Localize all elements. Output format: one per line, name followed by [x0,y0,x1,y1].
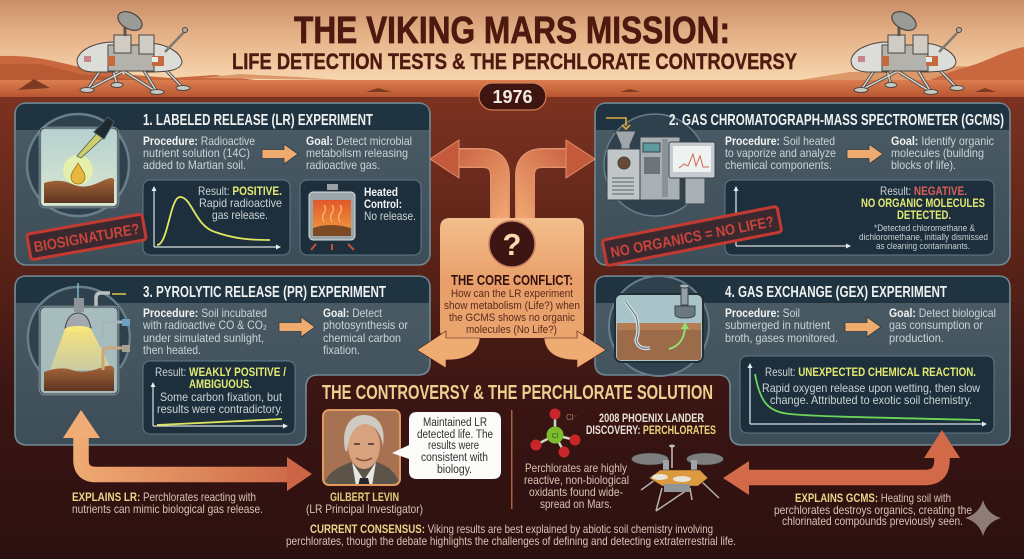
icon: sparkle [965,500,1001,536]
panel: GCMS experiment [595,103,1010,266]
heated control box: Control: [364,197,402,211]
chart: unexpected reaction result [740,356,994,433]
subtitle: LIFE DETECTION TESTS & THE PERCHLORATE CONTROVERSY [232,49,797,74]
heading: Phoenix discovery: DISCOVERY: PERCHLORATES [586,425,716,437]
year badge [479,83,546,110]
heated control box: Heated [364,185,398,199]
year badge: 1976 [492,87,533,107]
arrow [262,144,298,164]
icon: question mark [489,221,535,267]
panel: gas exchange experiment [595,276,1010,445]
chart: weakly positive result: results were contradictory. [157,402,283,416]
panel: pyrolytic release experiment [15,276,430,445]
procedure text [143,134,255,172]
arrow: conflict to experiment 2 [525,140,595,222]
text: current consensus: perchlorates, though the debate highlights the challenges of defining and detecting extraterrestrial life. [286,535,736,548]
goal text: Goal: Detect biological [889,306,996,320]
heading: controversy section: THE CONTROVERSY & THE PERCHLORATE SOLUTION [322,382,713,404]
chart: negative result: *Detected chloromethane & [874,223,975,233]
goal text: Goal: Identify organic [891,134,994,148]
chart: unexpected reaction result: change. Attributed to exotic soil chemistry. [770,393,972,407]
procedure text [725,306,838,345]
chart: positive result: gas release. [212,208,268,222]
text: perchlorates description: Perchlorates are highly [525,462,627,475]
chart: positive result [143,180,290,255]
icon: broth chamber [609,276,709,376]
conflict text: molecules (No Life?) [466,324,557,336]
text: explains GCMS: chlorinated compounds previously seen. [782,515,963,528]
goal text [306,134,412,172]
heading: 3. PYROLYTIC RELEASE (PR) EXPERIMENT [143,284,386,301]
arrow: explains LR [63,410,312,491]
icon: perchlorate molecule [530,408,580,458]
conflict text: How can the LR experiment [451,288,574,300]
heated control box: No release. [364,209,416,223]
procedure text: nutrient solution (14C) [143,146,250,160]
goal text: Goal: Detect microbial [306,134,412,148]
chart: weakly positive result: Result: WEAKLY POSITIVE / [155,365,287,379]
goal text: fixation. [323,343,360,357]
procedure text: with radioactive CO & CO₂ [142,318,267,332]
chart: negative result [725,180,994,255]
icon: soil beaker with dropper [27,114,129,216]
speech bubble: detected life. The [417,429,493,441]
procedure text: Procedure: Radioactive [143,134,255,148]
procedure text: added to Martian soil. [143,158,246,172]
conflict text [444,288,580,336]
text: explains GCMS: perchlorates destroys organics, creating the [774,504,972,517]
caption: Gilbert Levin: (LR Principal Investigator) [306,503,423,516]
text: perchlorates description: oxidants found wide- [529,486,623,499]
procedure text: under simulated sunlight, [143,331,264,345]
icon: GCMS machine [604,114,715,216]
procedure text: to vaporize and analyze [725,146,836,160]
heading: Phoenix discovery: 2008 PHOENIX LANDER [599,413,705,425]
goal text: radioactive gas. [306,158,380,172]
chart: positive result: Result: POSITIVE. [198,184,282,198]
procedure text: Procedure: Soil heated [725,134,835,148]
chart: negative result: Result: NEGATIVE. [880,184,967,198]
speech bubble: consistent with [421,452,488,464]
text: explains LR [72,491,263,516]
goal text: photosynthesis or [323,318,408,332]
icon: perchlorate molecule: Cl⁻ [566,413,578,422]
chart: weakly positive result [143,361,295,434]
text: explains LR: EXPLAINS LR: Perchlorates reacting with [72,491,256,504]
icon: Viking lander left [77,8,190,94]
arrow: explains GCMS [723,430,960,495]
panel: labeled release experiment [15,103,430,265]
icon: lamp chamber [28,283,130,394]
panel: core conflict [440,218,584,338]
heading: 1. LABELED RELEASE (LR) EXPERIMENT [143,112,373,129]
goal text: molecules (building [891,146,984,160]
procedure text: then heated. [143,343,201,357]
conflict heading: THE CORE CONFLICT: [451,272,573,289]
procedure text: broth, gases monitored. [725,331,838,345]
goal text [323,306,408,357]
speech bubble [392,412,501,479]
speech bubble: results were [428,440,479,452]
chart: negative result: NO ORGANIC MOLECULES [861,196,985,210]
goal text: Goal: Detect [323,306,383,320]
heading: Phoenix discovery [586,413,716,437]
procedure text [725,134,836,172]
chart: weakly positive result: Some carbon fixation, but [160,390,283,404]
chart: weakly positive result: AMBIGUOUS. [189,377,252,391]
text: explains GCMS [774,492,972,528]
text: explains GCMS: EXPLAINS GCMS: Heating soil with [795,492,951,505]
portrait: Gilbert Levin [323,410,400,486]
procedure text: chemical components. [725,158,832,172]
text: current consensus [286,523,736,548]
procedure text: Procedure: Soil incubated [143,306,267,320]
goal text: gas consumption or [889,318,983,332]
chart: positive result: Rapid radioactive [199,196,282,210]
stamp: biosignature: BIOSIGNATURE? [33,221,141,256]
chart: negative result: DETECTED. [897,208,951,222]
arrow [279,317,315,337]
caption: Gilbert Levin: GILBERT LEVIN [330,492,399,504]
arrow: conflict to experiment 4 [544,331,606,368]
text: perchlorates description: reactive, non-biological [524,474,629,487]
icon: Viking lander right [851,8,964,94]
chart: unexpected reaction result: Result: UNEXPECTED CHEMICAL REACTION. [765,365,976,379]
goal text: chemical carbon [323,331,401,345]
goal text: production. [889,331,944,345]
heated control box [300,180,421,255]
chart: negative result: as cleaning contaminants. [876,241,970,251]
heading: 4. GAS EXCHANGE (GEX) EXPERIMENT [725,284,947,301]
text: perchlorates description: spread on Mars. [540,498,612,511]
title: THE VIKING MARS MISSION: [294,10,730,52]
goal text: metabolism releasing [306,146,408,160]
arrow: conflict to experiment 3 [417,331,480,368]
goal text [891,134,994,172]
icon: question mark: ? [503,227,521,262]
arrow: conflict to experiment 1 [430,140,500,222]
speech bubble: Maintained LR [423,417,487,429]
caption: Gilbert Levin [306,492,423,516]
text: current consensus: CURRENT CONSENSUS: Viking results are best explained by abiotic soil chemistry involving [310,523,713,536]
goal text: blocks of life). [891,158,956,172]
text: explains LR: nutrients can mimic biological gas release. [72,503,263,516]
arrow [845,317,881,337]
speech bubble: biology. [437,464,472,476]
procedure text: submerged in nutrient [725,318,831,332]
procedure text [142,306,267,357]
stamp: no organics: NO ORGANICS = NO LIFE? [609,213,775,262]
goal text [889,306,996,345]
text: perchlorates description [524,462,629,511]
icon: perchlorate molecule: Cl [552,433,559,440]
conflict text: the GCMS shows no organic [449,312,575,324]
chart: negative result: dichloromethane, initially dismissed [859,232,988,242]
arrow [847,144,883,164]
conflict text: show metabolism (Life?) when [444,300,580,312]
chart: unexpected reaction result: Rapid oxygen release upon wetting, then slow [762,381,980,395]
procedure text: Procedure: Soil [725,306,800,320]
icon: Phoenix lander [632,444,724,511]
